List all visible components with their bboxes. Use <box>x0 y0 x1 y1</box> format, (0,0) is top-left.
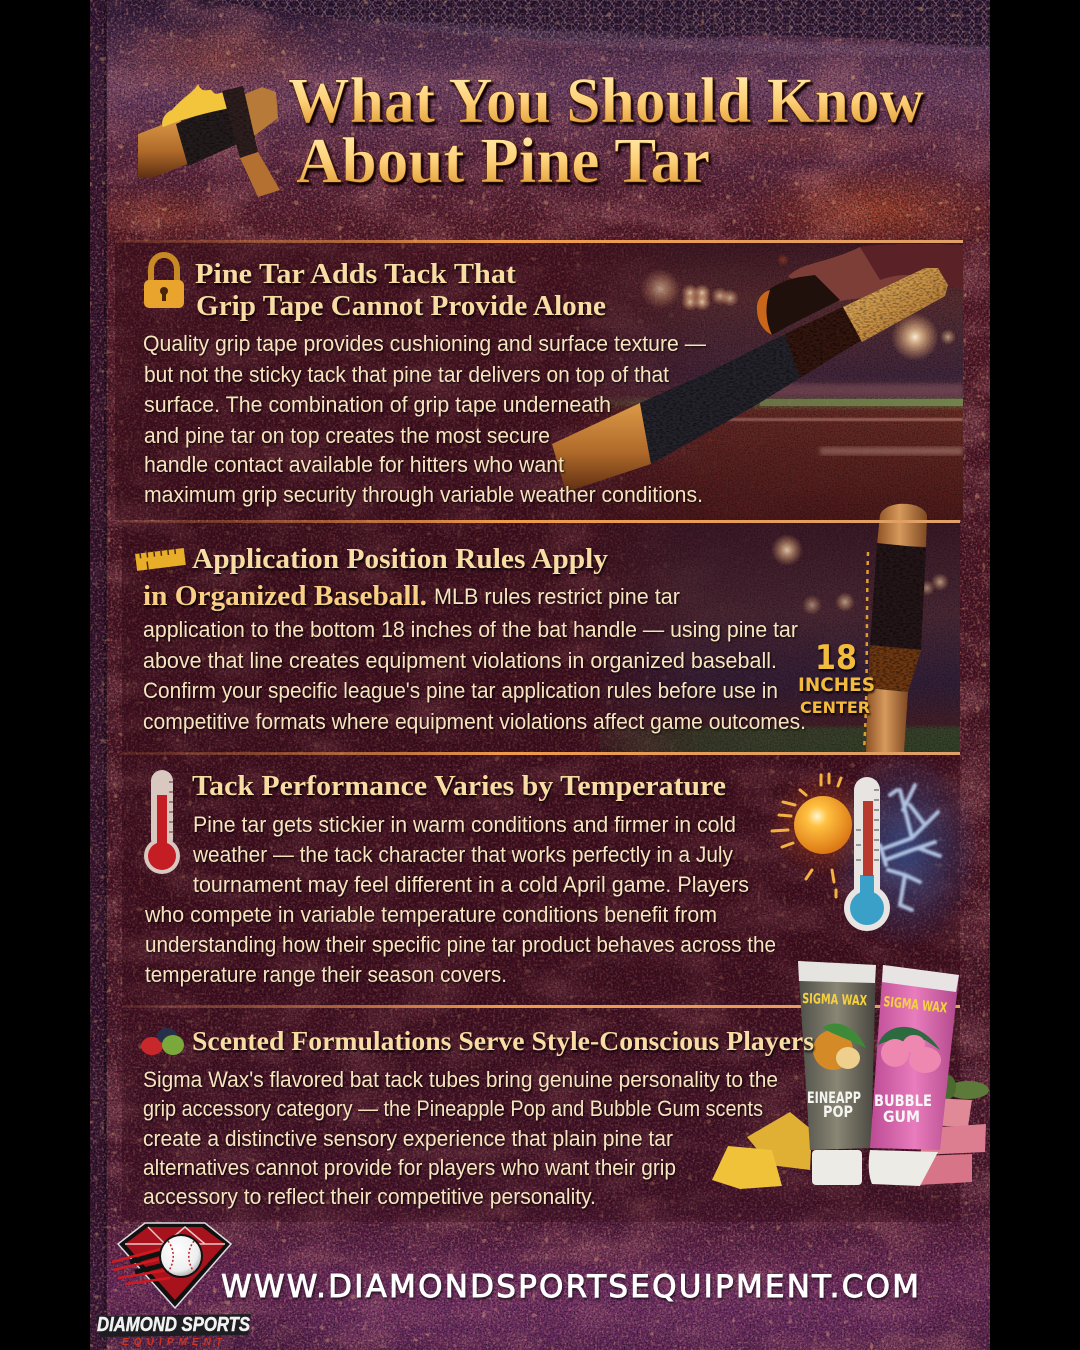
text block: scented: grip accessory category — the Pineapple Pop and Bubble Gum scents <box>143 1096 763 1121</box>
icon: padlock <box>144 255 184 308</box>
text block: scented <box>143 1067 778 1209</box>
icon: thermometer <box>844 777 890 931</box>
text block: scented: Sigma Wax's flavored bat tack tubes bring genuine personality to the <box>143 1067 778 1092</box>
text block: grip tape: maximum grip security through variable weather conditions. <box>144 482 703 507</box>
label: 18 inches: CENTER <box>800 698 870 717</box>
text block: temperature: tournament may feel different in a cold April game. Players <box>193 872 749 897</box>
label: 18 inches: INCHES <box>798 674 875 696</box>
panel rule <box>115 240 963 243</box>
tube: pineapple pop: EINEAPP <box>807 1088 861 1107</box>
panel: temperature <box>122 750 980 1006</box>
text block: temperature: Pine tar gets stickier in warm conditions and firmer in cold <box>193 812 736 837</box>
logo: diamond sports: EQUIPMENT <box>122 1337 223 1348</box>
product group: sigma wax tubes <box>712 961 989 1189</box>
stadium photo <box>600 523 960 752</box>
tube: bubble gum <box>869 965 959 1186</box>
tube: bubble gum: SIGMA WAX <box>883 994 948 1017</box>
icon: red thermometer <box>144 770 180 874</box>
panel: scented formulations <box>122 1007 960 1222</box>
text block: application: above that line creates equipment violations in organized baseball. <box>143 648 777 673</box>
label: 18 inches: 18 <box>815 638 857 678</box>
label: 18 inches <box>798 638 875 717</box>
text block: grip tape: Quality grip tape provides cushioning and surface texture — <box>143 331 706 356</box>
bubble gum cubes <box>918 1075 989 1185</box>
heading: tack: Pine Tar Adds Tack That <box>195 258 516 290</box>
heading: application: in Organized Baseball. <box>143 580 427 612</box>
title: What You Should Know <box>288 65 924 137</box>
icon: flavor balls <box>141 1028 184 1055</box>
text block: temperature: who compete in variable temperature conditions benefit from <box>144 902 717 927</box>
icon: snowflake <box>880 785 940 910</box>
icon: pine tar bats <box>138 84 280 197</box>
title <box>288 65 924 197</box>
hand <box>788 244 963 301</box>
text block: grip tape: surface. The combination of grip tape underneath <box>144 392 611 417</box>
panel: grip tape <box>115 242 963 520</box>
logo: diamond sports: DIAMOND SPORTS <box>97 1314 251 1336</box>
heading: application: Application Position Rules Apply <box>192 543 609 575</box>
text block: scented: accessory to reflect their competitive personality. <box>143 1184 596 1209</box>
tube: pineapple pop: SIGMA WAX <box>802 991 868 1009</box>
title: About Pine Tar <box>296 125 710 197</box>
heading: tack: Grip Tape Cannot Provide Alone <box>196 290 606 322</box>
icon: ruler <box>135 548 186 571</box>
text block: grip tape: handle contact available for hitters who want <box>144 452 564 477</box>
stadium photo <box>560 243 963 520</box>
heading: tack <box>195 258 606 322</box>
heading: application <box>143 543 609 612</box>
text block: scented: create a distinctive sensory experience that plain pine tar <box>143 1126 673 1151</box>
text block: grip tape: but not the sticky tack that pine tar delivers on top of that <box>144 362 669 387</box>
tube: bubble gum: GUM <box>883 1107 920 1126</box>
text block: application: application to the bottom 18 inches of the bat handle — using pine tar <box>143 617 798 642</box>
bat: 18 inch marker <box>864 504 927 752</box>
panel rule <box>122 520 960 523</box>
text block: application <box>143 584 806 734</box>
panel rule <box>122 752 960 755</box>
logo: diamond sports <box>96 1223 251 1348</box>
text block: grip tape: and pine tar on top creates the most secure <box>144 423 550 448</box>
tube: bubble gum: BUBBLE <box>874 1091 932 1110</box>
text block: application: competitive formats where equipment violations affect game outcomes. <box>143 709 806 734</box>
text block: temperature <box>144 812 776 987</box>
text block: application: Confirm your specific league's pine tar application rules before use in <box>143 678 778 703</box>
heading: temperature: Tack Performance Varies by Temperature <box>192 771 726 802</box>
pineapple chunks <box>712 1112 812 1189</box>
tube: pineapple pop <box>798 961 876 1185</box>
panel: application position <box>122 504 960 753</box>
text block: temperature: temperature range their season covers. <box>145 962 507 987</box>
text block: temperature: understanding how their specific pine tar product behaves across the <box>145 932 776 957</box>
panel rule <box>122 1005 960 1008</box>
heading: scented: Scented Formulations Serve Style-Conscious Players <box>192 1026 814 1056</box>
text block: application: MLB rules restrict pine tar <box>434 584 680 609</box>
bat with grip tape <box>552 268 948 492</box>
text block: scented: alternatives cannot provide for players who want their grip <box>143 1155 676 1180</box>
text block: grip tape <box>143 331 706 507</box>
icon: sun <box>768 770 878 897</box>
tube: pineapple pop: POP <box>823 1102 853 1121</box>
website url: WWW.DIAMONDSPORTSEQUIPMENT.COM <box>221 1269 919 1305</box>
text block: temperature: weather — the tack character that works perfectly in a July <box>192 842 733 867</box>
